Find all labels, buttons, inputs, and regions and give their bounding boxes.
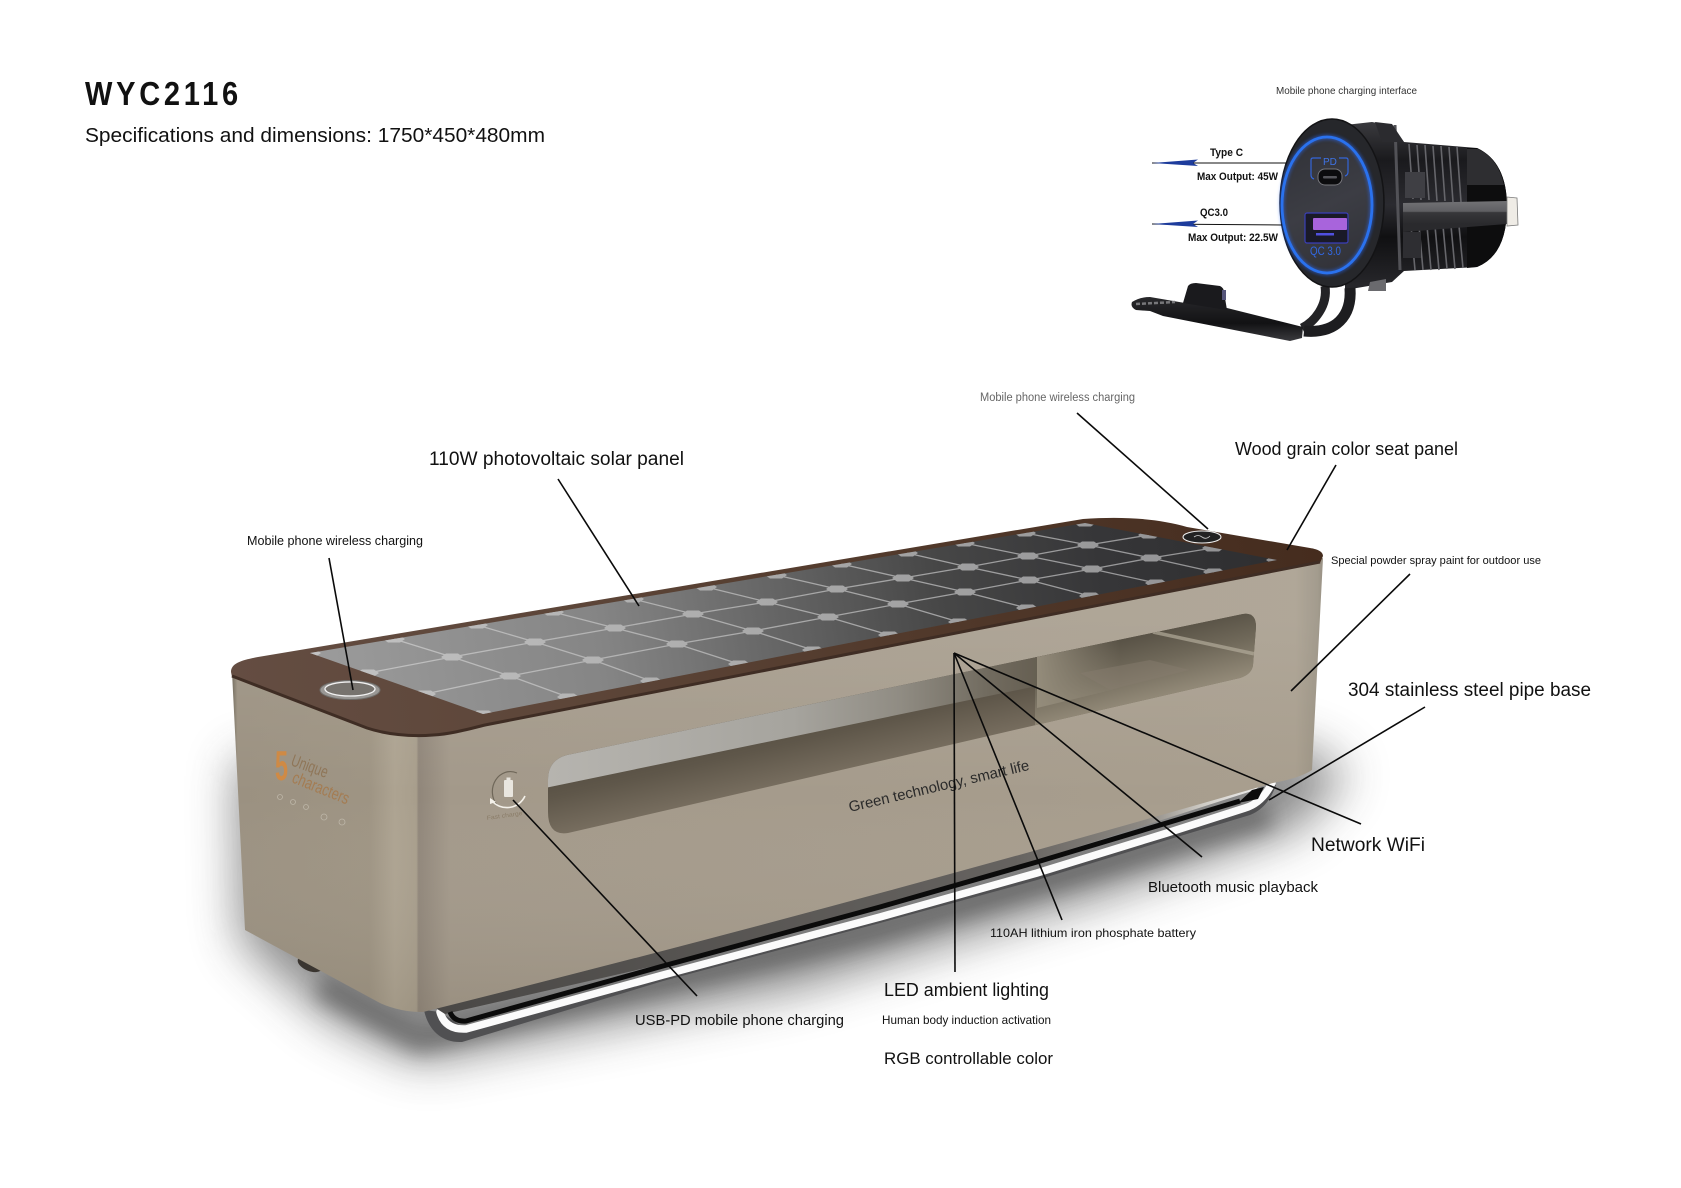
label: battery: 110AH lithium iron phosphate battery: [990, 926, 1196, 940]
icon: socket body: [1345, 122, 1518, 291]
solar panel: [299, 520, 1288, 718]
bench ground shadow: [236, 745, 1348, 1062]
icon: socket face with blue ring: [1280, 119, 1384, 287]
line: right wireless charging: [1077, 413, 1208, 529]
label: 45W output: Max Output: 45W: [1197, 171, 1279, 183]
icon: socket cover with strap: [1132, 283, 1350, 341]
line: bluetooth: [954, 653, 1202, 857]
usb-a port: QC 3.0: [1310, 244, 1341, 258]
line: battery: [954, 653, 1062, 920]
label: usb-pd charging: USB-PD mobile phone charging: [635, 1012, 844, 1029]
label: human body induction: Human body induction activation: [882, 1013, 1051, 1027]
label: bluetooth: Bluetooth music playback: [1148, 879, 1318, 896]
bench body: [232, 558, 1323, 1012]
line: usb-pd charging: [513, 800, 697, 996]
icon: right wireless charger: [1183, 531, 1221, 543]
see-through window: [548, 614, 1256, 834]
line: network wifi: [954, 653, 1361, 824]
line: wood seat panel: [1287, 465, 1336, 550]
arrow: qc3.0: [1152, 220, 1282, 227]
icon: usb-pd charging button: [486, 772, 525, 822]
arrow: type c: [1152, 160, 1287, 166]
body slogan: Green technology, smart life: [847, 757, 1031, 816]
label: stainless pipe base: 304 stainless steel pipe base: [1348, 680, 1591, 701]
label: qc3.0: QC3.0: [1200, 207, 1228, 219]
label: rgb color: RGB controllable color: [884, 1049, 1053, 1068]
label: network wifi: Network WiFi: [1311, 835, 1425, 856]
logo: 5 unique characters: characters: [290, 768, 352, 808]
title: WYC2116: [85, 75, 238, 112]
specifications subtitle: Specifications and dimensions: 1750*450*480mm: [85, 125, 545, 147]
line: left wireless charging: [329, 558, 353, 690]
panel: charging interface product: [1132, 85, 1518, 341]
callout lines: [329, 413, 1425, 996]
line: led lighting: [954, 653, 955, 972]
wood seat panel: [231, 518, 1323, 737]
black shadow line: [450, 787, 1264, 1021]
logo: 5 unique characters: Unique: [289, 751, 331, 782]
line: powder spray paint: [1291, 574, 1410, 691]
line: solar panel: [558, 479, 639, 606]
bench foot: [295, 953, 325, 975]
label: solar panel: 110W photovoltaic solar panel: [429, 449, 684, 470]
label: right wireless charging: Mobile phone wireless charging: [980, 392, 1135, 404]
logo: 5 unique characters: 5: [275, 742, 288, 789]
type-c port: PD: [1323, 157, 1337, 168]
heading: charging interface: Mobile phone charging interface: [1276, 85, 1417, 97]
label: left wireless charging: Mobile phone wireless charging: [247, 533, 423, 548]
label: 22.5W output: Max Output: 22.5W: [1188, 232, 1279, 244]
icon: usb-pd charging button: Fast charge: [486, 811, 524, 822]
usb-a port: [1305, 213, 1348, 258]
label: type c: Type C: [1210, 147, 1243, 159]
logo: 5 unique characters: [275, 742, 352, 825]
label: wood seat panel: Wood grain color seat panel: [1235, 439, 1458, 459]
type-c port: [1311, 157, 1348, 185]
row of function icons: [278, 794, 345, 825]
line: stainless pipe base: [1269, 707, 1425, 800]
label: powder spray paint: Special powder spray paint for outdoor use: [1331, 555, 1541, 567]
steel pipe base: [424, 783, 1276, 1042]
panel: solar bench: [231, 518, 1323, 1042]
icon: left wireless charger: [320, 680, 380, 700]
label: led lighting: LED ambient lighting: [884, 980, 1049, 1000]
underside band: [423, 775, 1273, 1014]
